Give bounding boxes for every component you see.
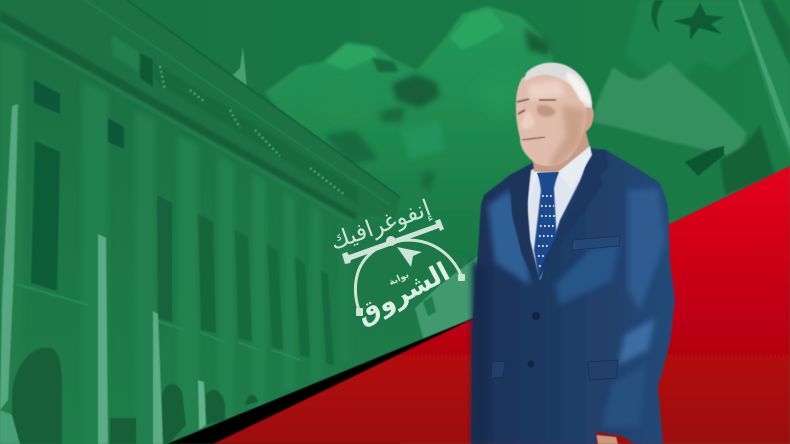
flag crescent (651, 0, 664, 33)
parliament building (0, 0, 478, 444)
arches (12, 348, 258, 444)
lower storey ledges (16, 284, 300, 360)
breast pocket (572, 236, 620, 250)
logo arc (355, 240, 462, 313)
building facade (0, 10, 472, 444)
ear (581, 106, 594, 132)
smoke clouds (265, 6, 553, 270)
flag star (673, 3, 724, 40)
roof band (0, 0, 400, 218)
collar (528, 146, 592, 205)
tie (534, 172, 558, 280)
flag on pole (593, 0, 790, 195)
jacket buttons (528, 312, 540, 368)
head (516, 63, 594, 166)
neck (532, 128, 590, 172)
flagpole (738, 0, 790, 158)
logo small label: بوابة (388, 270, 411, 288)
face shadow (548, 105, 586, 166)
man in blue suit (471, 63, 675, 444)
tie knot (537, 172, 559, 187)
black diagonal band (167, 315, 481, 444)
side pockets (587, 360, 618, 380)
suit jacket (471, 148, 675, 444)
logo arrow (397, 247, 422, 267)
logo wordmark: الشروق (352, 257, 455, 331)
logo arc end caps (356, 274, 465, 316)
spire (230, 47, 247, 88)
frieze block (140, 53, 153, 87)
pale vertical pillars (0, 104, 206, 444)
suit shading (472, 188, 666, 444)
eyes and brows (517, 99, 556, 114)
hand (596, 435, 618, 444)
pale building block (415, 256, 478, 345)
logo title: إنفوغرافيك (327, 195, 434, 256)
cornice (0, 10, 357, 220)
lower flag star (685, 146, 724, 176)
red diagonal panel (213, 166, 790, 444)
mouth (522, 137, 545, 140)
hair (524, 63, 592, 108)
windows (31, 80, 334, 366)
shirt (527, 148, 590, 280)
logo bar (342, 219, 444, 264)
columns (0, 40, 350, 444)
lapels (510, 168, 534, 280)
nose (521, 110, 534, 129)
logo (327, 195, 465, 331)
face (516, 68, 587, 166)
flag highlight fold (593, 62, 747, 158)
